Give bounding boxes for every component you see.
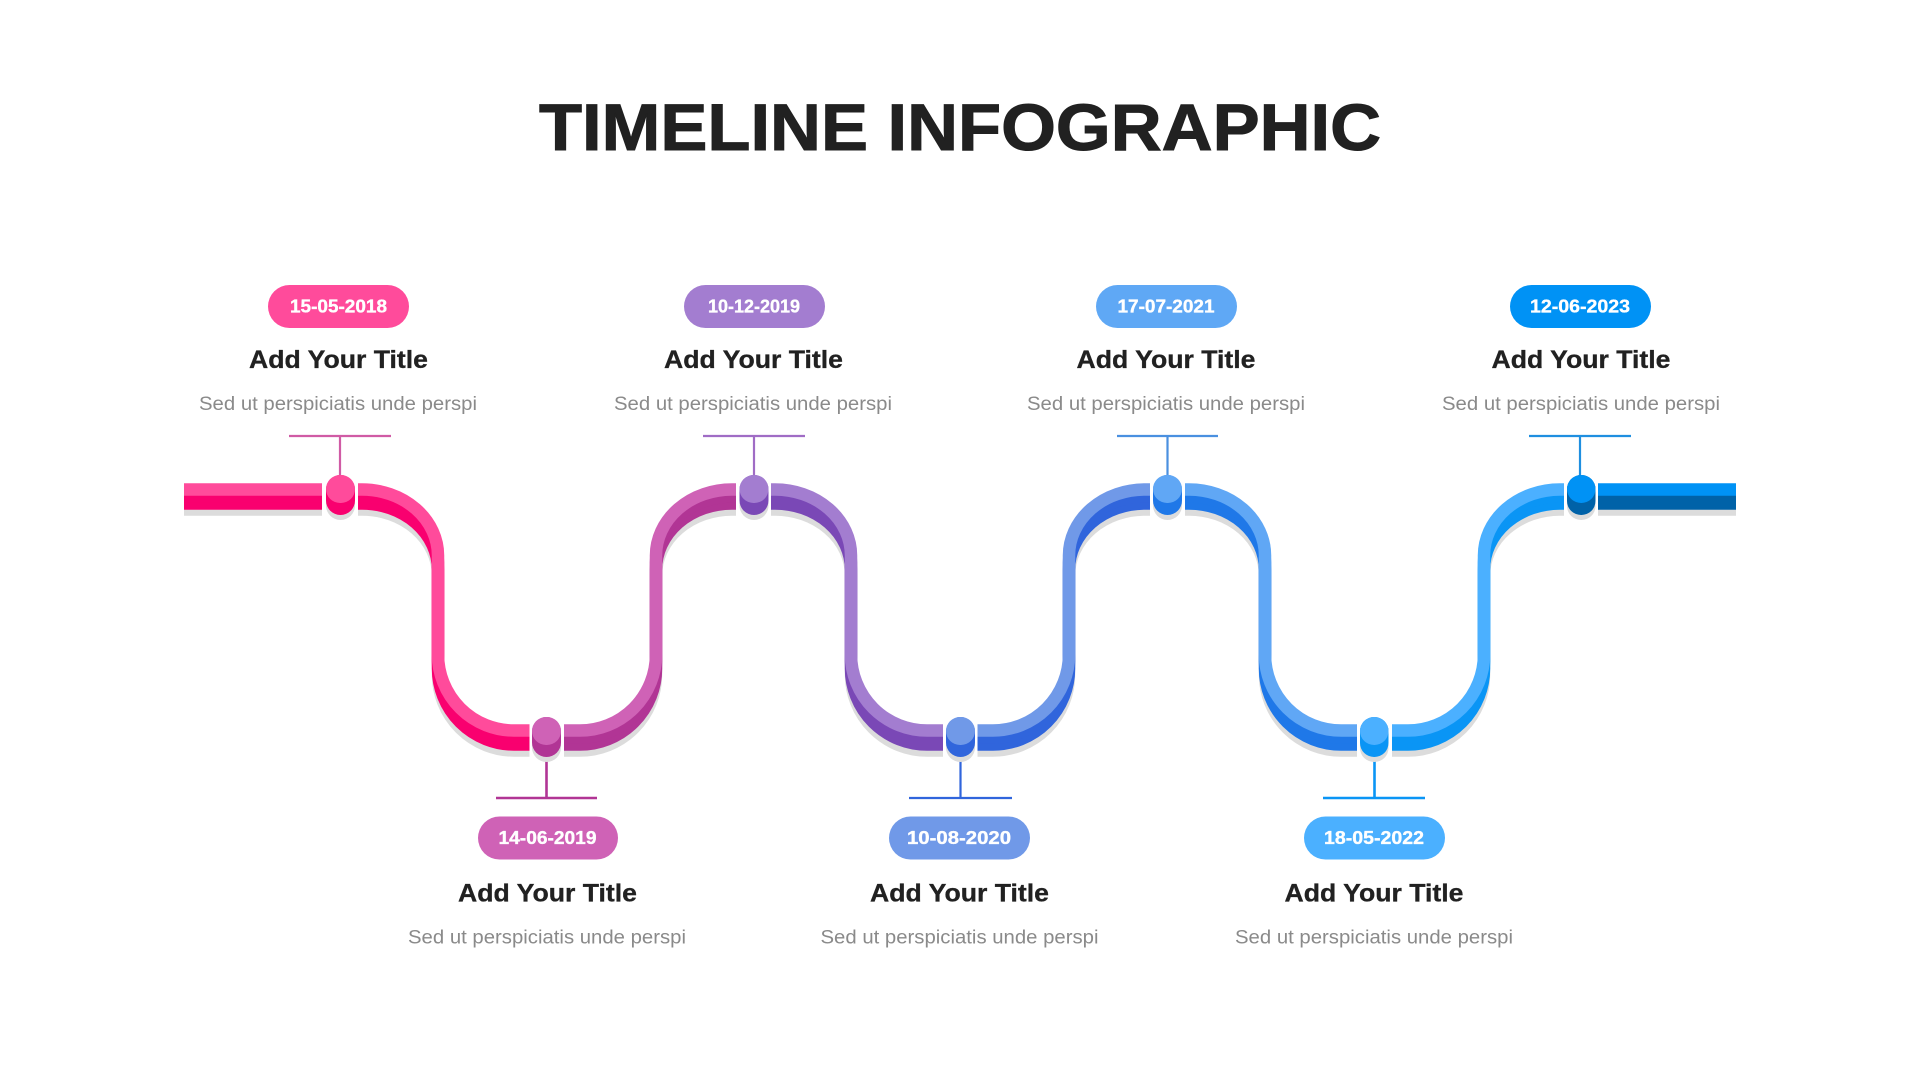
milestone 2: 14-06-2019 xyxy=(408,717,686,948)
ribbon: segment magenta xyxy=(564,490,736,750)
node xyxy=(1153,475,1182,520)
milestone 1: 15-05-2018 xyxy=(199,285,477,520)
connector xyxy=(703,436,805,476)
connector xyxy=(496,756,597,798)
milestone 7: 12-06-2023 xyxy=(1442,285,1720,520)
date pill: 17-07-2021 xyxy=(1118,297,1214,317)
heading: Add Your Title xyxy=(249,346,428,374)
date pill xyxy=(1096,285,1237,328)
description: Sed ut perspiciatis unde perspi xyxy=(1235,928,1513,948)
node xyxy=(946,717,975,762)
title: TIMELINE INFOGRAPHIC xyxy=(539,90,1381,164)
date pill: 12-06-2023 xyxy=(1530,297,1630,317)
description: Sed ut perspiciatis unde perspi xyxy=(820,928,1098,948)
heading: Add Your Title xyxy=(870,880,1049,908)
ribbon: segment sky xyxy=(1392,490,1564,750)
node xyxy=(1360,717,1388,762)
description: Sed ut perspiciatis unde perspi xyxy=(1442,394,1720,415)
connector xyxy=(1529,436,1631,476)
milestone 6: 18-05-2022 xyxy=(1235,717,1513,948)
date pill xyxy=(478,816,618,860)
date pill: 10-12-2019 xyxy=(708,297,800,317)
date pill xyxy=(684,285,825,328)
date pill xyxy=(1304,816,1445,860)
ribbon: left bar xyxy=(184,490,322,510)
node xyxy=(1567,475,1596,520)
date pill xyxy=(889,816,1030,860)
heading: Add Your Title xyxy=(664,346,843,374)
date pill: 14-06-2019 xyxy=(498,828,596,848)
date pill: 10-08-2020 xyxy=(907,828,1011,848)
heading: Add Your Title xyxy=(1284,880,1464,908)
connector xyxy=(909,756,1012,798)
date pill xyxy=(268,285,409,328)
node xyxy=(532,717,561,762)
milestone 5: 17-07-2021 xyxy=(1027,285,1305,520)
node xyxy=(740,475,768,520)
description: Sed ut perspiciatis unde perspi xyxy=(614,394,892,415)
ribbon: right bar xyxy=(1598,490,1736,510)
description: Sed ut perspiciatis unde perspi xyxy=(1027,394,1305,415)
connector xyxy=(1117,436,1218,476)
ribbon: segment blue xyxy=(1185,490,1357,750)
heading: Add Your Title xyxy=(1076,346,1256,374)
connector xyxy=(289,436,391,476)
ribbon: segment purple xyxy=(771,490,943,750)
date pill xyxy=(1510,285,1651,328)
heading: Add Your Title xyxy=(1492,346,1671,374)
heading: Add Your Title xyxy=(458,880,637,908)
node xyxy=(326,475,355,520)
milestone 4: 10-08-2020 xyxy=(820,717,1098,948)
ribbon: segment pink xyxy=(358,490,530,750)
ribbon: segment periwinkle xyxy=(978,490,1150,750)
date pill: 18-05-2022 xyxy=(1324,828,1424,848)
connector xyxy=(1323,756,1425,798)
description: Sed ut perspiciatis unde perspi xyxy=(408,928,686,948)
date pill: 15-05-2018 xyxy=(290,297,387,317)
description: Sed ut perspiciatis unde perspi xyxy=(199,394,477,415)
milestone 3: 10-12-2019 xyxy=(614,285,892,520)
